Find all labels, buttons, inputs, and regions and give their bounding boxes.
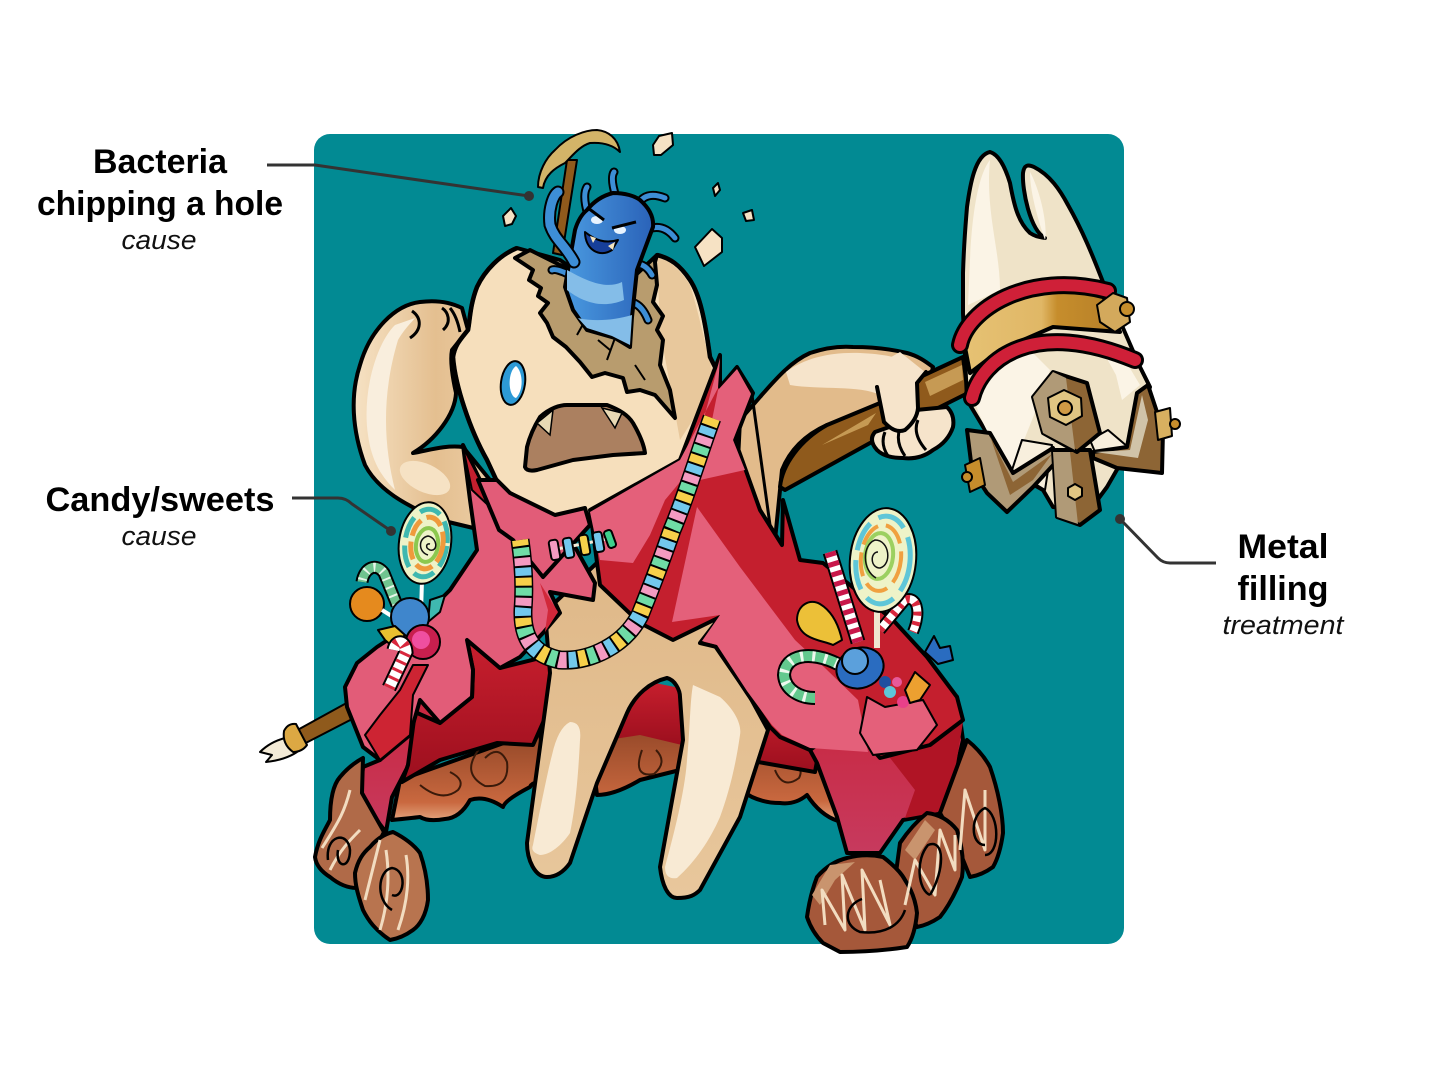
left trouser leg: [360, 695, 440, 832]
left vest panel: [345, 445, 595, 760]
collar left: [478, 480, 590, 577]
callout: filling leader line: [1115, 514, 1216, 563]
callout: bacteria leader line: [267, 165, 534, 201]
screaming mouth: [525, 405, 645, 471]
mouth: [585, 232, 618, 253]
left shoe: [315, 758, 428, 940]
label: candy: [46, 481, 274, 551]
label: bacteria: chipping a hole: [37, 185, 283, 223]
eyes: [591, 216, 603, 224]
pickaxe: [538, 130, 620, 255]
metal stem: [1053, 450, 1100, 525]
candy necklace: [520, 418, 712, 660]
yellow wrapper: [378, 626, 405, 646]
lollipop swirl: [394, 499, 456, 587]
body: [565, 193, 653, 347]
wooden hammer handle: [780, 357, 968, 490]
pink candy: [406, 625, 440, 659]
big hammer head: capped tooth: [960, 152, 1180, 525]
bacteria monster: [550, 172, 675, 347]
lollipop stick: [874, 608, 880, 648]
antennae and legs: [552, 172, 675, 320]
right candies: [784, 505, 953, 755]
label: bacteria: cause: [122, 225, 196, 255]
left clamp: [967, 430, 1056, 512]
teal wrapper: [428, 595, 445, 622]
striped cane: [389, 643, 406, 688]
head crown: [453, 248, 720, 530]
label: bacteria: [37, 143, 283, 255]
right clamp: [1093, 385, 1163, 473]
top bolt: [1097, 293, 1130, 332]
hex nut: [1048, 390, 1082, 425]
root highlights: [532, 722, 580, 855]
left arm: [354, 301, 490, 532]
blue candy: [391, 598, 429, 636]
pink highlight: [672, 507, 868, 752]
blue candy: [831, 641, 889, 695]
red strip: [365, 665, 428, 760]
striped straw: [830, 552, 858, 642]
green cane: [362, 567, 397, 605]
tooth cusps: [1012, 430, 1128, 490]
right vest panel: [590, 355, 963, 758]
label: metal filling: [1222, 528, 1345, 640]
lower red band: [972, 342, 1135, 398]
gripping hand: [872, 352, 953, 458]
right shoes: [807, 740, 1003, 952]
lower tooth with roots: [527, 560, 768, 898]
root highlight: [968, 160, 1140, 470]
illustration: tooth character: [260, 130, 1180, 952]
collar beads: [552, 538, 612, 550]
flying tooth chips: [503, 133, 754, 266]
blue wrapped candy: [925, 636, 953, 664]
collar pink: [590, 358, 720, 563]
pocket candies: [879, 676, 891, 688]
small hammer handle end: [260, 700, 358, 762]
orange candy: [350, 587, 384, 621]
side bolts: [965, 458, 985, 492]
lollipop swirl: [845, 505, 921, 615]
lollipop stick: [421, 580, 422, 612]
label: candy: Candy/sweets: [46, 481, 274, 519]
green cane: [784, 656, 838, 698]
callout: candy leader line: [292, 498, 396, 536]
label: metal filling: filling: [1238, 570, 1328, 608]
panel: teal background: [314, 134, 1124, 944]
metal hex plate: [1033, 372, 1100, 452]
label: bacteria: Bacteria: [93, 143, 228, 181]
dark red inner vest: [402, 640, 820, 782]
yellow wrapped candy: [797, 602, 842, 645]
cavity hole: [515, 250, 675, 418]
left candies: [350, 499, 456, 688]
red striped cane back: [880, 599, 917, 632]
label: candy: cause: [122, 521, 196, 551]
arm: [550, 192, 574, 262]
sleeve slit: [700, 369, 751, 480]
label: metal filling: treatment: [1222, 610, 1345, 640]
gold band: [963, 290, 1120, 373]
right arm with lower beige torso: [735, 347, 933, 540]
pocket flap: [860, 697, 937, 755]
brown frill behind roots: [392, 720, 838, 821]
right trouser leg: [810, 697, 963, 853]
upper red band: [960, 285, 1108, 345]
eye: [498, 360, 528, 406]
label: metal filling: Metal: [1238, 528, 1328, 566]
hammer tooth: [963, 152, 1150, 510]
